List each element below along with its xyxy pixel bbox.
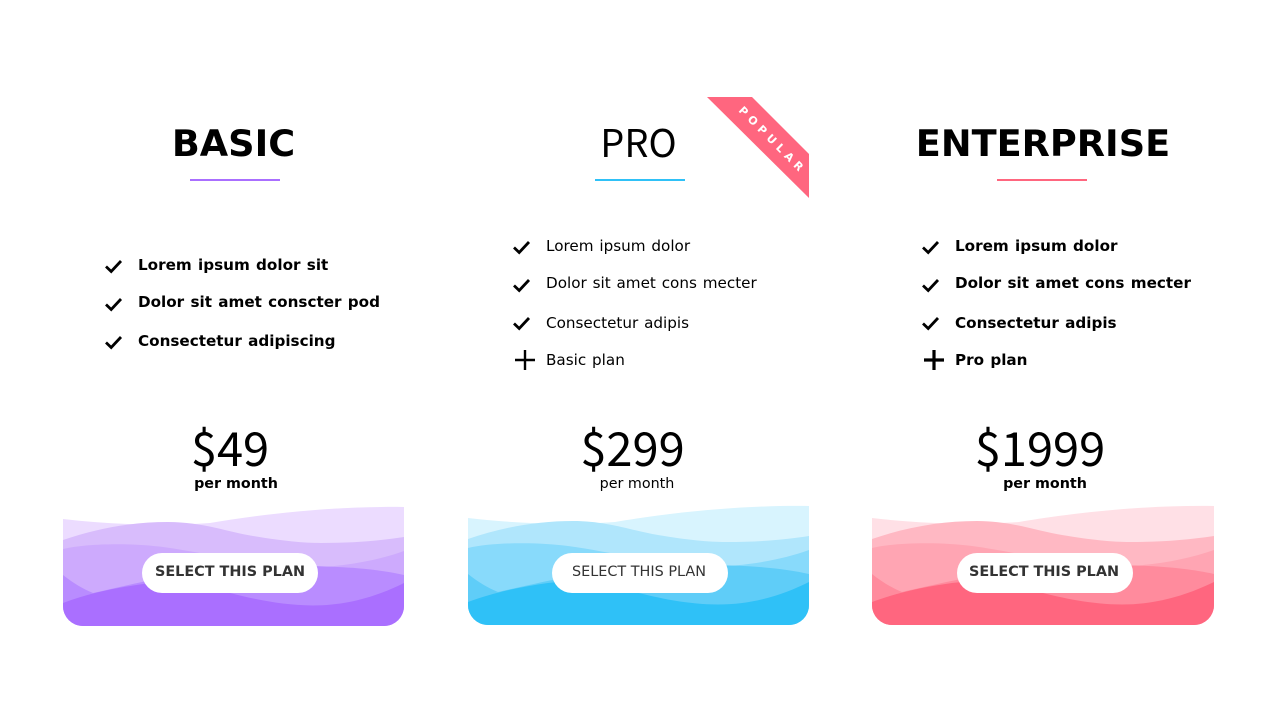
heading: BASIC: BASIC — [172, 122, 295, 165]
feature text: Pro plan — [955, 351, 1027, 369]
icon: check — [513, 241, 530, 254]
panel: enterprise plan — [872, 122, 1214, 625]
feature text: Basic plan — [546, 351, 625, 369]
feature text: Dolor sit amet cons mecter — [546, 274, 757, 292]
ribbon: popular — [707, 97, 809, 198]
button: pro — [552, 553, 728, 593]
wave panel: enterprise — [872, 506, 1214, 625]
heading underline: pro — [595, 179, 685, 181]
feature text: Consectetur adipiscing — [138, 332, 335, 350]
icon: check — [105, 298, 122, 312]
heading underline: enterprise — [997, 179, 1087, 181]
feature text: Lorem ipsum dolor — [955, 237, 1118, 255]
feature text: Dolor sit amet conscter pod — [138, 293, 380, 311]
price period: pro: per month — [600, 476, 674, 492]
icon: check — [922, 279, 939, 292]
feature text: Lorem ipsum dolor — [546, 237, 690, 255]
wave panel: pro — [468, 506, 809, 625]
heading: PRO: PRO — [600, 113, 677, 168]
icon: check — [513, 317, 530, 330]
heading underline: basic — [190, 179, 280, 181]
button: basic — [142, 553, 318, 593]
feature list: enterprise — [922, 237, 1191, 370]
feature list: pro — [513, 237, 757, 370]
wave panel: basic — [63, 506, 404, 626]
price period: enterprise: per month — [1003, 476, 1087, 492]
icon: check — [105, 260, 122, 274]
feature text: Consectetur adipis — [955, 314, 1117, 332]
feature text: Consectetur adipis — [546, 314, 689, 332]
button: pro: SELECT THIS PLAN — [572, 564, 706, 580]
feature text: Dolor sit amet cons mecter — [955, 274, 1191, 292]
feature text: Lorem ipsum dolor sit — [138, 256, 328, 274]
price period: basic: per month — [194, 476, 278, 492]
panel: pro plan — [468, 97, 809, 625]
price: pro: $299 — [580, 411, 685, 480]
icon: check — [922, 317, 939, 330]
icon: check — [922, 241, 939, 254]
icon: check — [513, 279, 530, 292]
icon: plus — [515, 350, 535, 370]
button: enterprise: SELECT THIS PLAN — [969, 564, 1119, 580]
panel: basic plan — [63, 122, 404, 626]
button: enterprise — [957, 553, 1133, 593]
icon: plus — [924, 350, 944, 370]
price: enterprise: $1999 — [975, 411, 1105, 480]
ribbon label: POPULAR — [736, 104, 809, 177]
button: basic: SELECT THIS PLAN — [155, 564, 305, 580]
price: basic: $49 — [191, 411, 269, 480]
heading: ENTERPRISE: ENTERPRISE — [916, 122, 1170, 165]
feature list: basic — [105, 256, 380, 350]
icon: check — [105, 336, 122, 350]
